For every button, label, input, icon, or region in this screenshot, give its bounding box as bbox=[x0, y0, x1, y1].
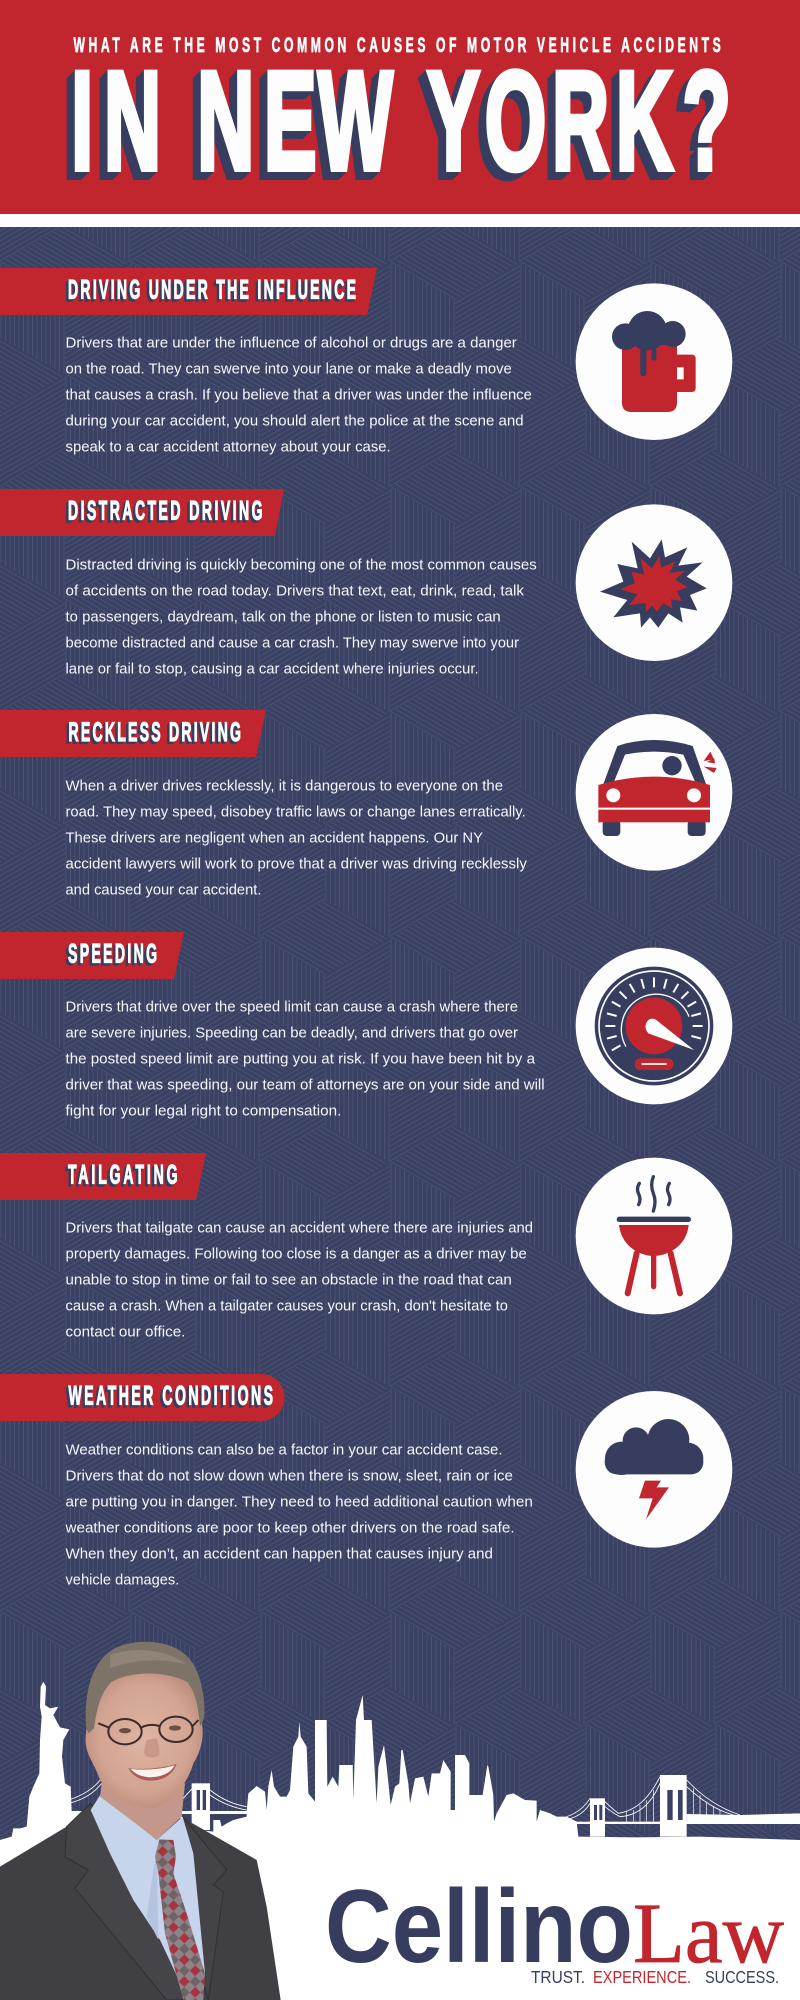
body text bbox=[66, 557, 537, 677]
panel: distracted driving bbox=[0, 489, 537, 677]
body text: are putting you in danger. They need to heed additional caution when bbox=[66, 1494, 533, 1510]
body text: Weather conditions can also be a factor in your car accident case. bbox=[66, 1442, 502, 1458]
portrait: attorney bbox=[0, 1642, 281, 2000]
icon: car bbox=[576, 714, 732, 871]
ribbon heading: TAILGATING bbox=[68, 1160, 178, 1190]
panel: tailgating bbox=[0, 1153, 533, 1340]
body text: weather conditions are poor to keep other drivers on the road safe. bbox=[64, 1520, 515, 1536]
body text: When they don’t, an accident can happen that causes injury and bbox=[66, 1546, 493, 1562]
body text: of accidents on the road today. Drivers that text, eat, drink, read, talk bbox=[66, 583, 525, 599]
body text: driver that was speeding, our team of attorneys are on your side and will bbox=[66, 1077, 545, 1093]
body text bbox=[66, 335, 532, 455]
footer skyline bbox=[0, 1682, 800, 2000]
header subtitle: WHAT ARE THE MOST COMMON CAUSES OF MOTOR VEHICLE ACCIDENTS bbox=[73, 32, 721, 57]
body text: are severe injuries. Speeding can be deadly, and drivers that go over bbox=[66, 1025, 518, 1041]
panel: speeding bbox=[0, 932, 545, 1119]
ribbon heading bbox=[0, 932, 184, 979]
body text: property damages. Following too close is a danger as a driver may be bbox=[66, 1246, 527, 1262]
left bridge bbox=[68, 1778, 247, 1832]
body text: Drivers that are under the influence of alcohol or drugs are a danger bbox=[66, 335, 517, 351]
tagline: TRUST. bbox=[531, 1967, 585, 1987]
main title: IN NEW YORK? bbox=[71, 43, 731, 200]
body text: contact our office. bbox=[66, 1324, 185, 1340]
right bridge bbox=[567, 1775, 800, 1837]
icon: storm cloud bbox=[576, 1391, 732, 1548]
tagline bbox=[531, 1967, 779, 1987]
body text: and caused your car accident. bbox=[66, 882, 261, 898]
ribbon heading: WEATHER CONDITIONS bbox=[68, 1381, 273, 1411]
body text: become distracted and cause a car crash. They may swerve into your bbox=[66, 635, 519, 651]
body text: during your car accident, you should alert the police at the scene and bbox=[66, 413, 524, 429]
tagline: SUCCESS. bbox=[705, 1967, 779, 1987]
icon: beer mug bbox=[576, 283, 732, 440]
body text bbox=[66, 1220, 533, 1340]
glasses bbox=[98, 1717, 198, 1744]
body text: the posted speed limit are putting you at risk. If you have been hit by a bbox=[66, 1051, 536, 1067]
ribbon heading: DISTRACTED DRIVING bbox=[68, 496, 262, 526]
body text: Drivers that tailgate can cause an accident where there are injuries and bbox=[66, 1220, 533, 1236]
body text bbox=[64, 1442, 533, 1588]
body text bbox=[66, 778, 528, 898]
header banner bbox=[0, 0, 800, 227]
body text: on the road. They can swerve into your lane or make a deadly move bbox=[66, 361, 512, 377]
body text: Drivers that drive over the speed limit can cause a crash where there bbox=[66, 999, 518, 1015]
ribbon heading: SPEEDING bbox=[68, 939, 157, 969]
body text: road. They may speed, disobey traffic laws or change lanes erratically. bbox=[66, 804, 526, 820]
ribbon heading bbox=[0, 1374, 284, 1421]
body text: to passengers, daydream, talk on the phone or listen to music can bbox=[66, 609, 501, 625]
icon: barbecue grill bbox=[576, 1158, 732, 1314]
ribbon heading: DRIVING UNDER THE INFLUENCE bbox=[68, 275, 356, 305]
body text: Drivers that do not slow down when there is snow, sleet, rain or ice bbox=[66, 1468, 513, 1484]
body text: When a driver drives recklessly, it is dangerous to everyone on the bbox=[66, 778, 503, 794]
body text: These drivers are negligent when an accident happens. Our NY bbox=[66, 830, 483, 846]
body text: speak to a car accident attorney about your case. bbox=[66, 439, 391, 455]
ribbon heading bbox=[0, 710, 266, 757]
icon: speedometer bbox=[576, 948, 732, 1104]
body text: vehicle damages. bbox=[66, 1572, 179, 1588]
body text: Distracted driving is quickly becoming one of the most common causes bbox=[66, 557, 537, 573]
icon: explosion burst bbox=[576, 504, 732, 661]
ribbon heading bbox=[0, 268, 377, 315]
body text: lane or fail to stop, causing a car accident where injuries occur. bbox=[66, 661, 479, 677]
body text: that causes a crash. If you believe that a driver was under the influence bbox=[66, 387, 532, 403]
logo: Cellino Law bbox=[325, 1869, 784, 1987]
body text: accident lawyers will work to prove that a driver was driving recklessly bbox=[66, 856, 528, 872]
tagline: EXPERIENCE. bbox=[593, 1967, 691, 1987]
body text: unable to stop in time or fail to see an obstacle in the road that can bbox=[66, 1272, 512, 1288]
ribbon heading bbox=[0, 489, 284, 536]
ribbon heading: RECKLESS DRIVING bbox=[68, 717, 241, 747]
panel: reckless driving bbox=[0, 710, 528, 898]
wordmark Law: Law bbox=[633, 1885, 784, 1981]
panel: driving under the influence bbox=[0, 268, 532, 455]
ribbon heading bbox=[0, 1153, 206, 1200]
wordmark Cellino: Cellino bbox=[325, 1869, 633, 1985]
panel: weather conditions bbox=[0, 1374, 533, 1588]
body text: cause a crash. When a tailgater causes your crash, don't hesitate to bbox=[66, 1298, 508, 1314]
body text bbox=[66, 999, 545, 1119]
body text: fight for your legal right to compensation. bbox=[66, 1103, 341, 1119]
